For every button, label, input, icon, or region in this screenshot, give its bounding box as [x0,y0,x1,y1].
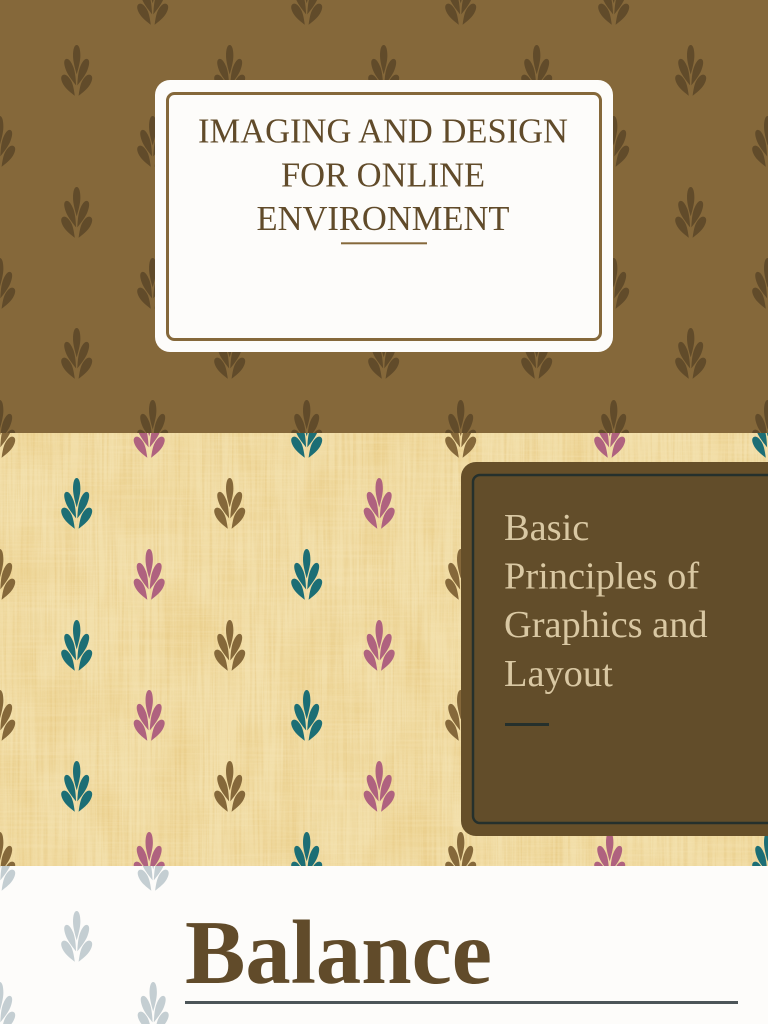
subtitle text: Graphics and [504,604,708,646]
panel: title card [155,80,613,352]
title: FOR ONLINE [281,156,485,194]
panel: linen patterned band [0,407,768,885]
heading: Balance [185,902,492,1003]
subtitle text: Principles of [504,556,699,598]
title: IMAGING AND DESIGN [198,113,568,151]
subtitle text: Basic [504,507,589,549]
panel: white footer band [0,866,738,1024]
panel: patterned brown band [0,0,768,453]
panel: subtitle card [461,462,768,836]
title: ENVIRONMENT [257,200,509,238]
subtitle text: Layout [504,653,613,695]
